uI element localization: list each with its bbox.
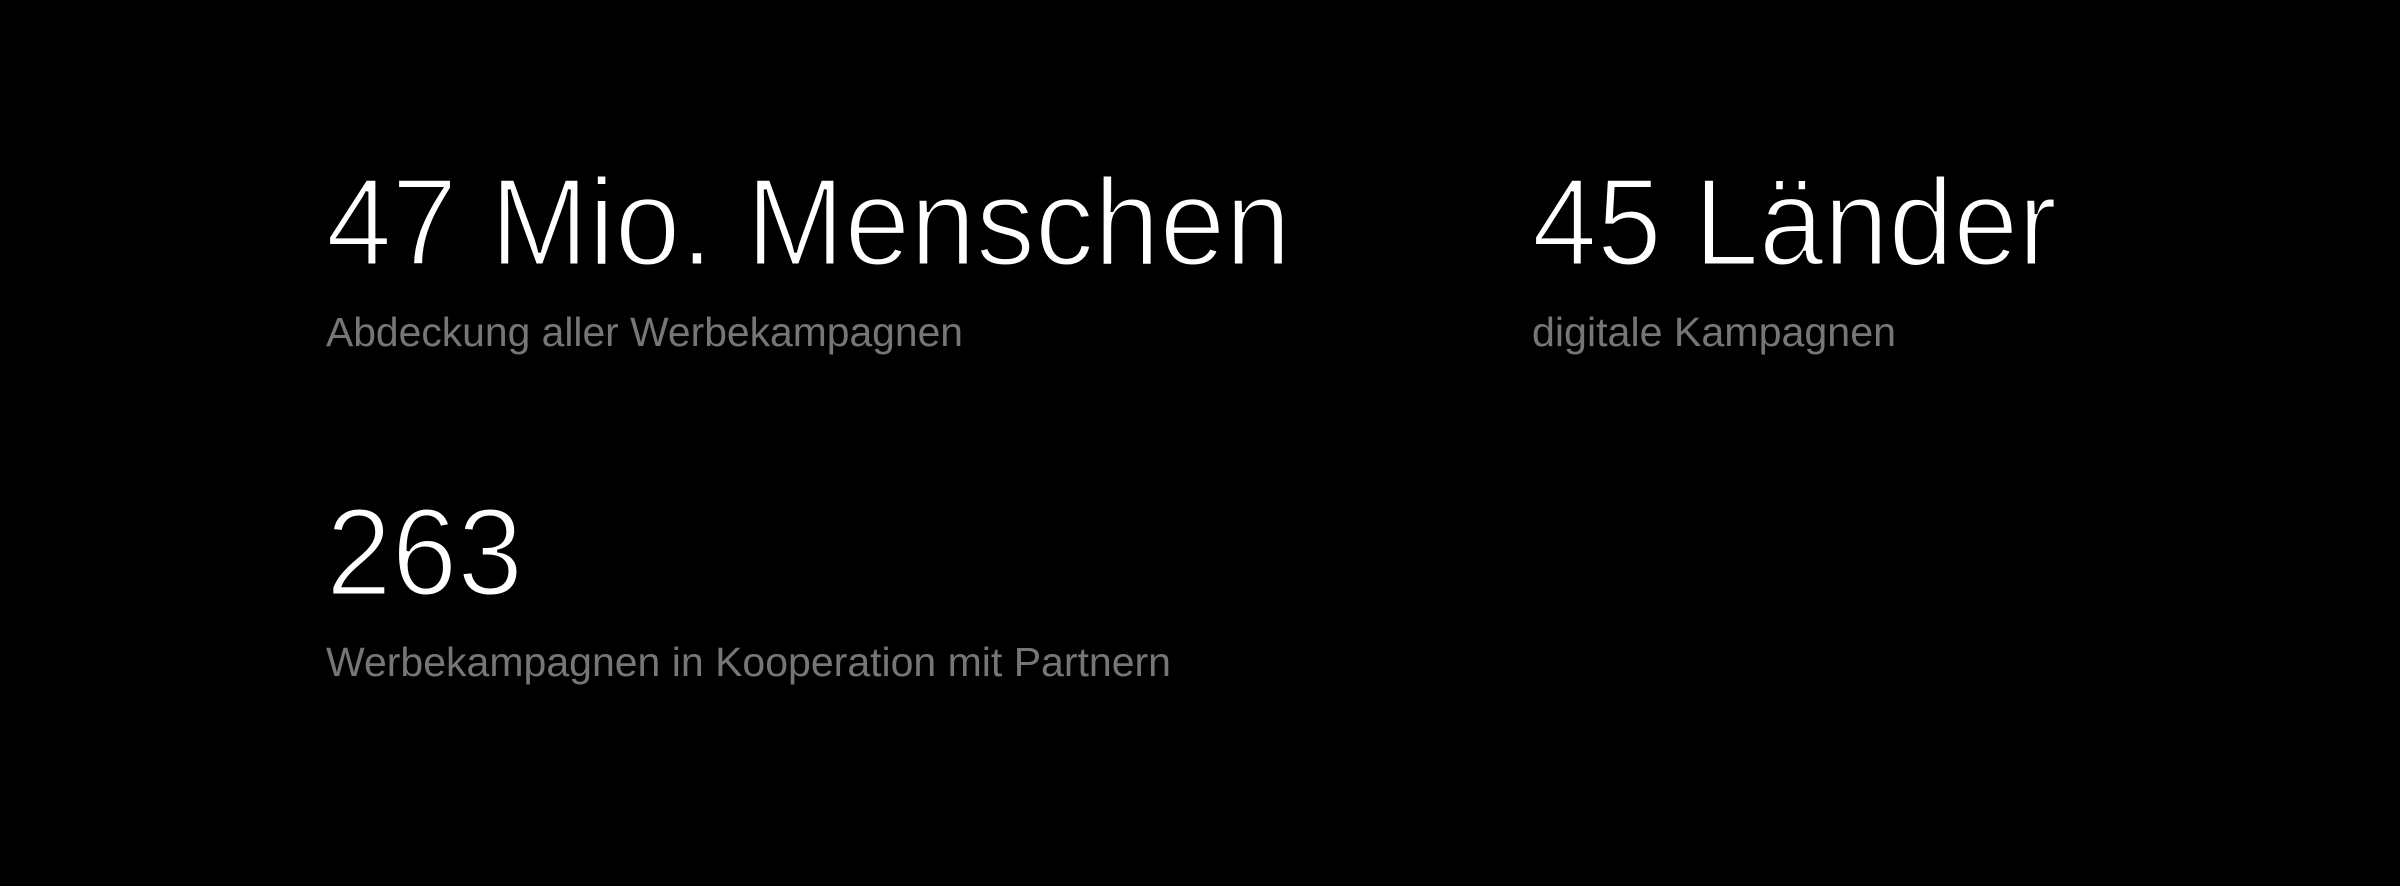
heading: 47 Mio. Menschen: 47 Mio. Menschen — [326, 154, 1291, 292]
text block: reach description: Abdeckung aller Werbekampagnen — [326, 309, 963, 355]
heading: 45 Länder: 45 Länder — [1532, 154, 2057, 292]
panel: campaigns statistic — [326, 484, 1171, 685]
panel: reach statistic — [326, 154, 1291, 355]
heading: 263: 263 — [326, 484, 523, 622]
panel: countries statistic — [1532, 154, 2057, 355]
text block: countries description: digitale Kampagnen — [1532, 309, 1896, 355]
text block: campaigns description: Werbekampagnen in Kooperation mit Partnern — [326, 639, 1171, 685]
